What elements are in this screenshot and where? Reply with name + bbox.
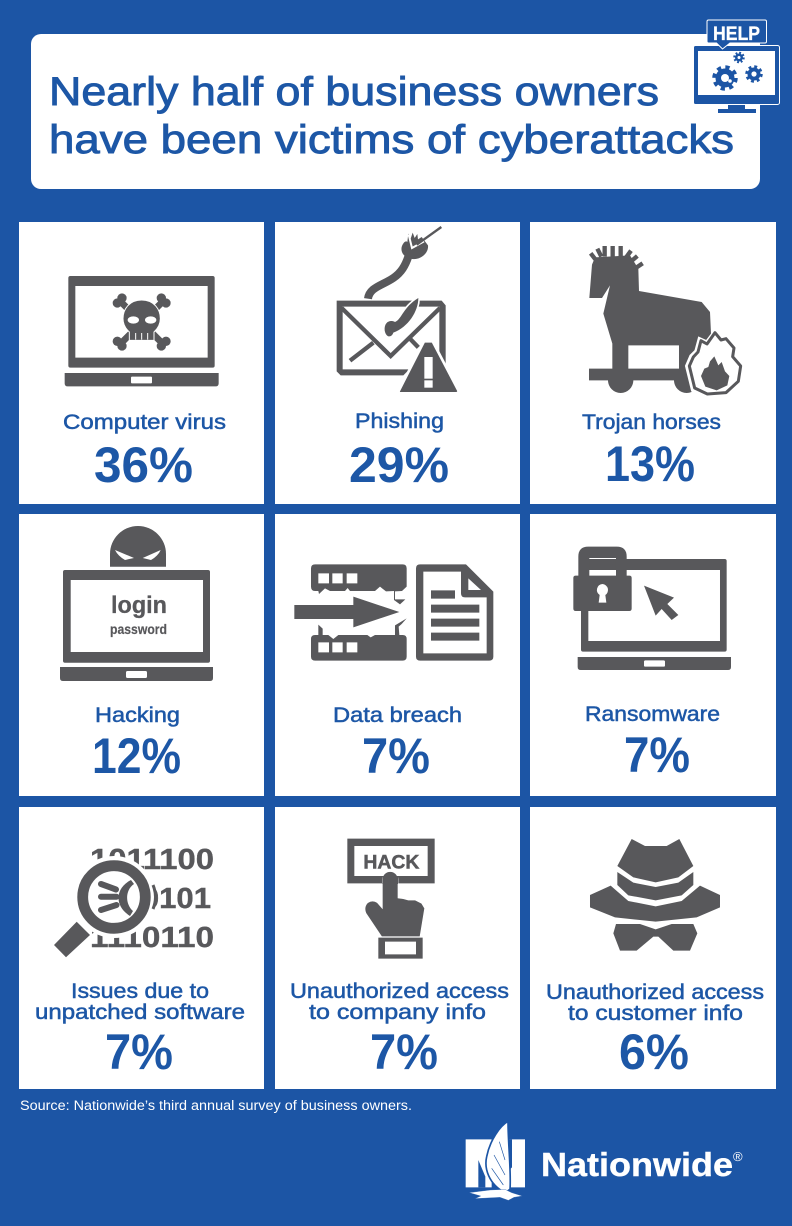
- icon: magnifier over binary: [54, 844, 214, 957]
- icon: trojan horse with flame: [589, 246, 743, 397]
- icon: hacker behind laptop: password: [110, 621, 167, 637]
- title: Nearly half of business owners: [49, 70, 659, 114]
- icon: hacker behind laptop: [60, 526, 213, 681]
- icon: magnifier over binary: 1110110: [90, 922, 214, 954]
- label: [546, 981, 764, 1025]
- icon: magnifier over binary: 1011100: [90, 844, 214, 876]
- label: Hacking: [95, 704, 180, 727]
- label: Phishing: [355, 410, 444, 433]
- title panel: [31, 34, 760, 189]
- label: Issues due to: [71, 980, 209, 1003]
- panel: unpatched software: [19, 807, 264, 1089]
- icon: help monitor with gears: [694, 20, 780, 113]
- label: Unauthorized access: [290, 980, 509, 1003]
- percentage: 7%: [362, 728, 430, 784]
- wordmark: Nationwide: [541, 1146, 733, 1183]
- icon: hacker behind laptop: login: [111, 592, 167, 619]
- icon: eagle N mark: [466, 1121, 525, 1200]
- percentage: 13%: [605, 436, 695, 492]
- percentage: 12%: [92, 728, 181, 784]
- label: to customer info: [568, 1002, 743, 1025]
- panel: customer info: [530, 807, 776, 1089]
- icon: phishing hook and envelope: [337, 227, 458, 393]
- title: have been victims of cyberattacks: [49, 118, 734, 162]
- panel: trojan horses: [530, 222, 776, 504]
- icon: spy hat and sunglasses: [590, 839, 720, 951]
- label: Data breach: [333, 704, 462, 727]
- icon: help monitor with gears: HELP: [713, 24, 760, 45]
- percentage: 7%: [105, 1024, 173, 1080]
- percentage: 36%: [94, 437, 193, 493]
- label: unpatched software: [35, 1001, 245, 1024]
- logo: Nationwide: [466, 1121, 743, 1200]
- panel: data breach: [275, 514, 520, 796]
- percentage: 29%: [349, 437, 449, 493]
- label: Computer virus: [63, 411, 226, 434]
- panel: hacking: [19, 514, 264, 796]
- panel: phishing: [275, 222, 520, 504]
- percentage: 7%: [370, 1024, 438, 1080]
- icon: finger pressing hack button: [347, 839, 435, 959]
- icon: finger pressing hack button: HACK: [363, 852, 419, 873]
- panel: ransomware: [530, 514, 776, 796]
- percentage: 6%: [619, 1024, 689, 1080]
- icon: magnifier over binary: 1000101: [90, 883, 211, 915]
- panel: computer virus: [19, 222, 264, 504]
- icon: laptop with skull: [65, 276, 219, 386]
- label: to company info: [309, 1001, 486, 1024]
- icon: padlock on laptop: [573, 547, 731, 670]
- label: Ransomware: [585, 703, 720, 726]
- label: Unauthorized access: [546, 981, 764, 1004]
- percentage: 7%: [624, 727, 690, 783]
- title: [49, 70, 734, 162]
- icon: broken server, arrow and document: [294, 564, 493, 661]
- panel: company info: [275, 807, 520, 1089]
- label: [290, 980, 509, 1024]
- label: Trojan horses: [582, 411, 721, 434]
- label: [35, 980, 245, 1024]
- registered mark: ®: [733, 1149, 743, 1164]
- source note: Source: Nationwide’s third annual survey of business owners.: [20, 1098, 412, 1113]
